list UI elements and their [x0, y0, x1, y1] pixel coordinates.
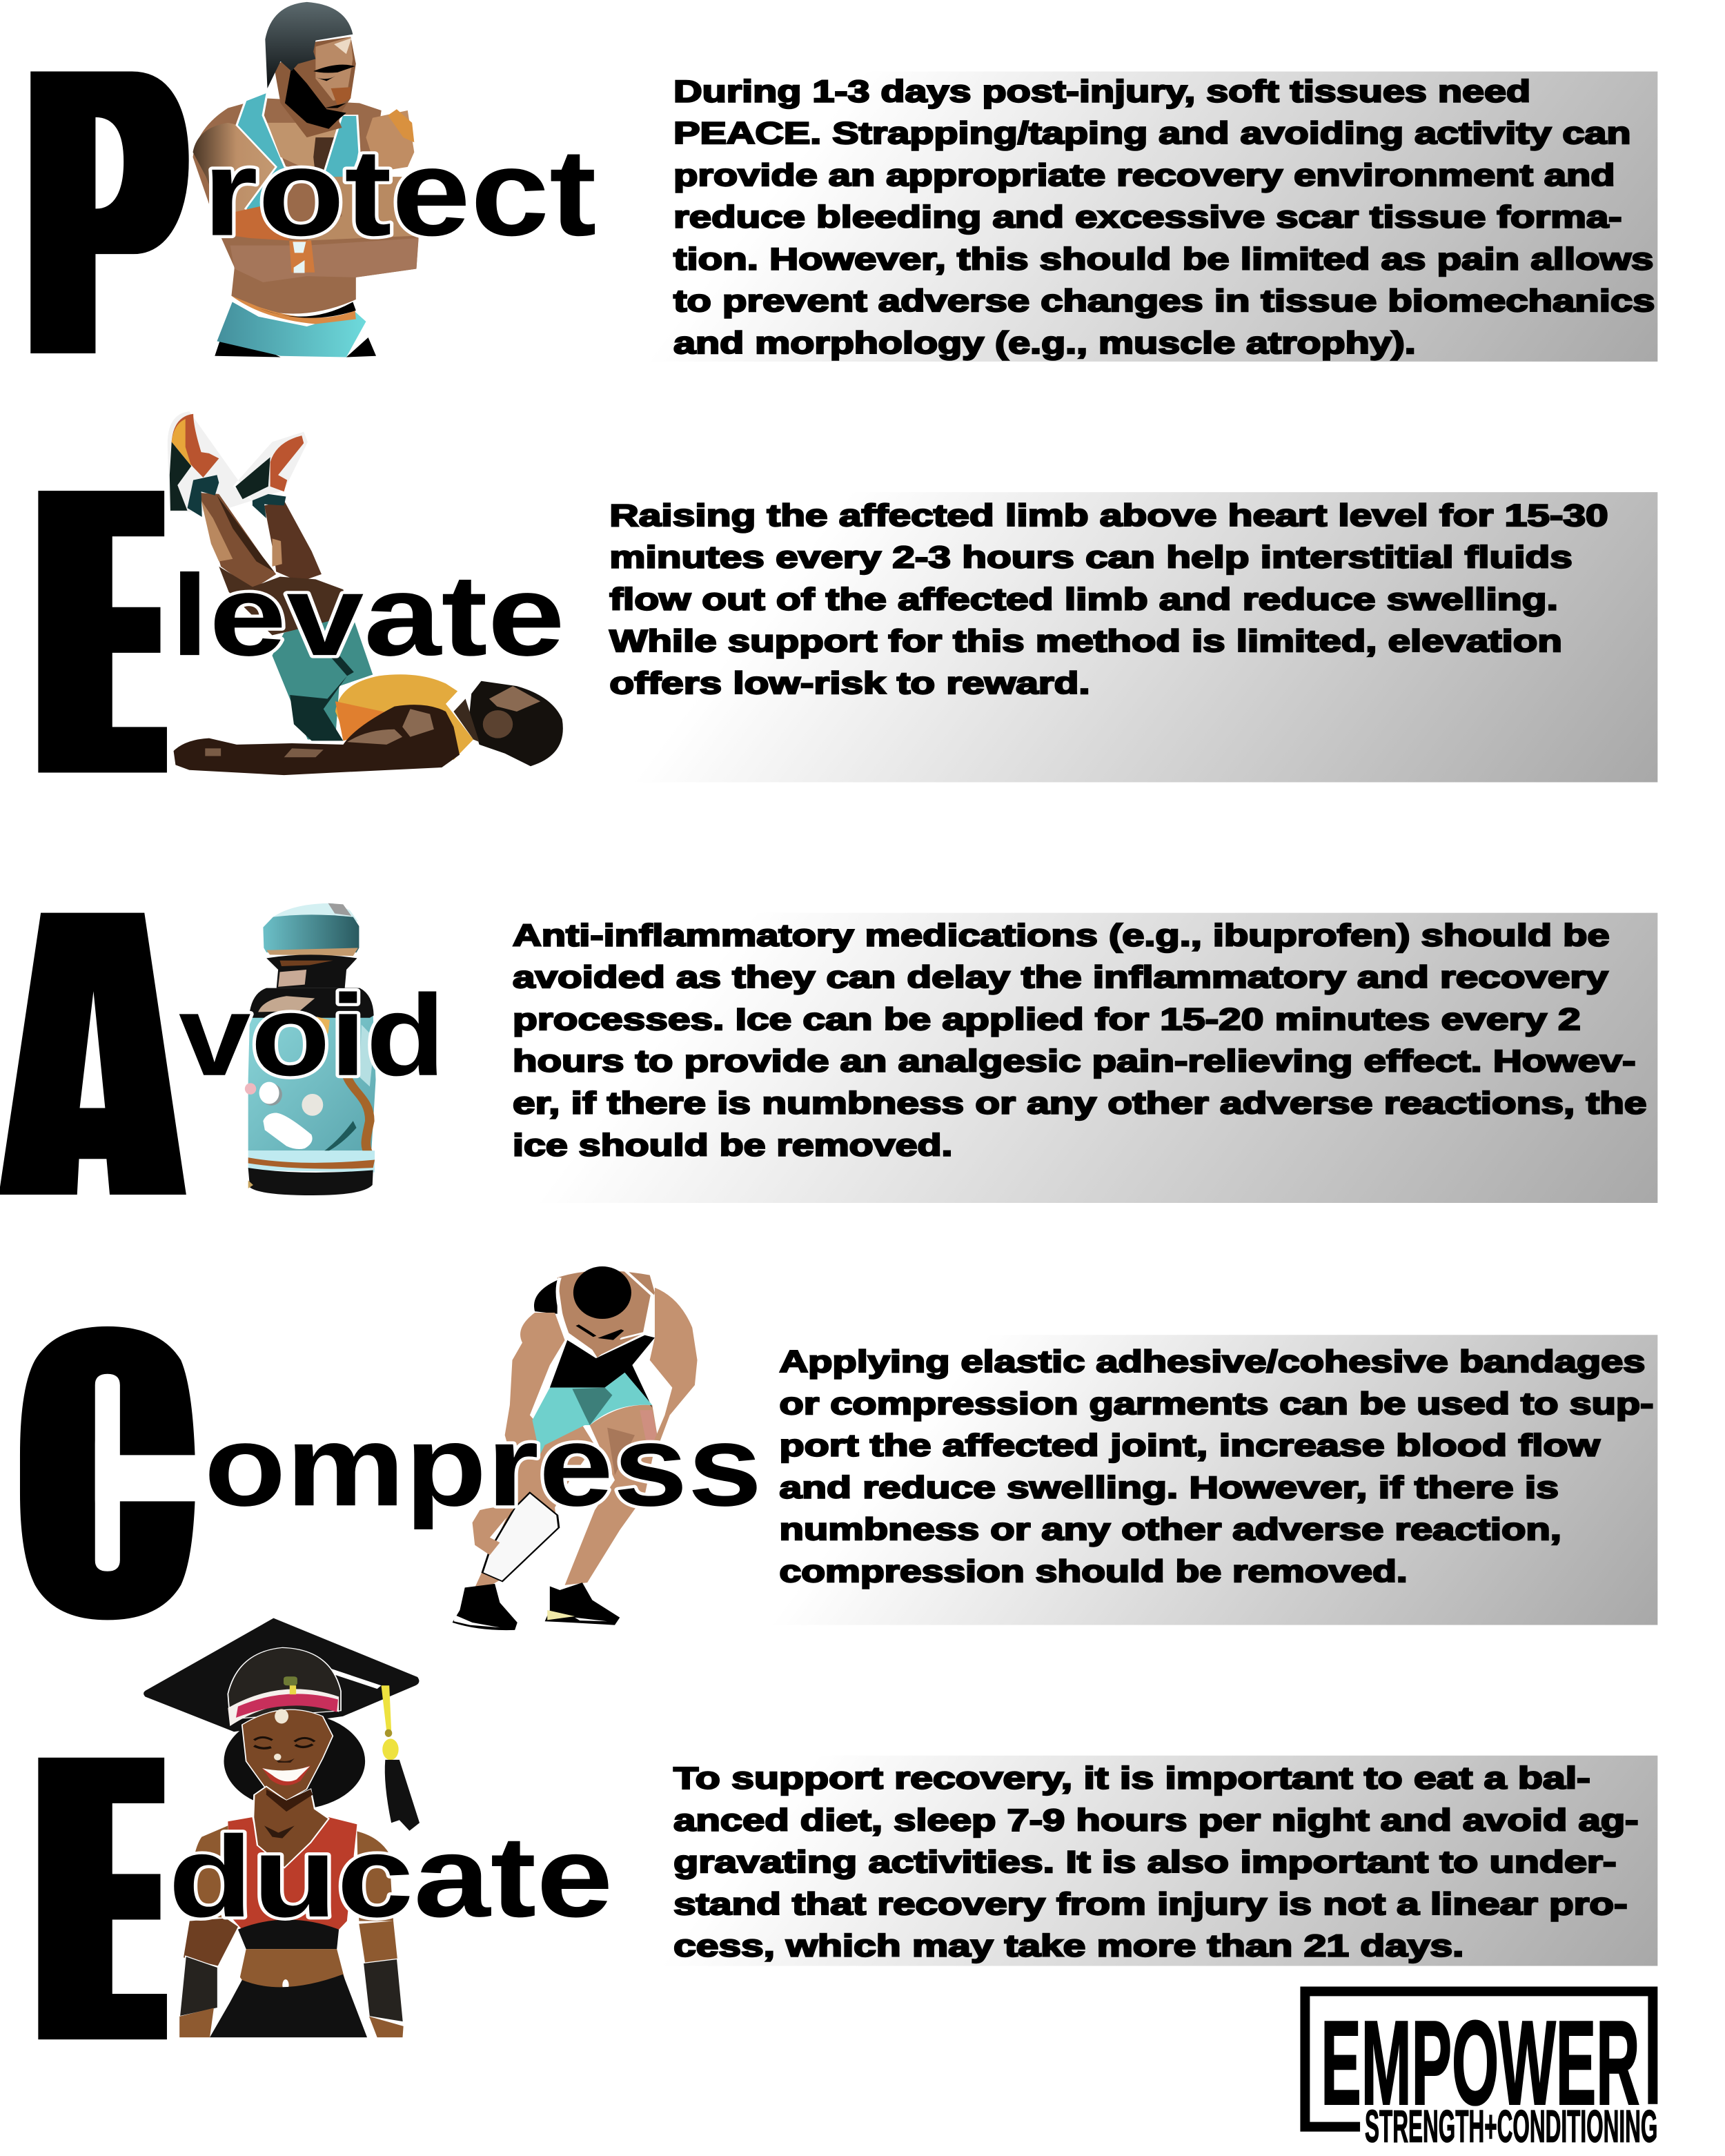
body text — [779, 1345, 1653, 1589]
body text — [673, 1762, 1638, 1963]
body text: anced diet, sleep 7-9 hours per night and avoid ag- — [673, 1803, 1638, 1837]
body text: Anti-inflammatory medications (e.g., ibuprofen) should be — [513, 919, 1610, 952]
panel: Compress description — [770, 1335, 1657, 1625]
body text: reduce bleeding and excessive scar tissue forma- — [673, 201, 1622, 235]
body text — [513, 919, 1646, 1162]
panel: Avoid description — [513, 913, 1657, 1203]
logo frame — [1300, 1986, 1657, 2132]
body text: PEACE. Strapping/taping and avoiding activity can — [673, 117, 1631, 150]
body text: er, if there is numbness or any other adverse reactions, the — [513, 1087, 1646, 1121]
body text: and morphology (e.g., muscle atrophy). — [673, 326, 1416, 360]
body text: offers low-risk to reward. — [609, 667, 1090, 700]
word: rotect: rotect — [203, 124, 597, 262]
illustration: athlete holding compressed leg — [453, 1266, 698, 1630]
section: Elevate — [57, 402, 1657, 860]
word: ompress: ompress — [204, 1402, 762, 1530]
body text: Applying elastic adhesive/cohesive bandages — [779, 1345, 1645, 1379]
section: Avoid — [32, 825, 1657, 1282]
body text: tion. However, this should be limited as pain allows — [673, 242, 1653, 276]
body text: port the affected joint, increase blood flow — [779, 1429, 1600, 1463]
body text: cess, which may take more than 21 days. — [673, 1930, 1463, 1963]
illustration: graduate athlete — [144, 1618, 420, 2037]
body text: To support recovery, it is important to eat a bal- — [673, 1762, 1590, 1796]
body text: minutes every 2-3 hours can help interstitial fluids — [609, 541, 1573, 575]
body text: or compression garments can be used to sup- — [779, 1387, 1653, 1421]
body text: Raising the affected limb above heart level for 15-30 — [609, 499, 1608, 533]
gradient background — [770, 1335, 1657, 1625]
body text: hours to provide an analgesic pain-relieving effect. Howev- — [513, 1045, 1635, 1079]
illustration: athlete with crossed arms — [193, 2, 419, 357]
body text: While support for this method is limited, elevation — [609, 625, 1562, 658]
body text — [609, 499, 1608, 700]
word: void: void — [179, 972, 445, 1100]
panel: Protect description — [646, 72, 1657, 362]
gradient background — [660, 1756, 1657, 1966]
gradient background — [536, 913, 1657, 1203]
logo: Empower Strength + Conditioning — [1300, 1986, 1657, 2152]
panel: Elevate description — [609, 492, 1657, 782]
body text — [673, 75, 1655, 360]
body text: and reduce swelling. However, if there is — [779, 1471, 1559, 1505]
body text: to prevent adverse changes in tissue biomechanics — [673, 284, 1655, 318]
illustration: medicine bottle with pills — [245, 903, 376, 1195]
body text: provide an appropriate recovery environment and — [673, 159, 1615, 193]
big letter E: E — [57, 1669, 144, 2127]
body text: gravating activities. It is also important to under- — [673, 1845, 1617, 1879]
panel: Educate description — [660, 1756, 1657, 1966]
big letter E: E — [57, 402, 144, 860]
big letter A: A — [32, 825, 153, 1282]
section: Educate — [57, 1618, 1657, 2127]
word: ducate: ducate — [168, 1813, 613, 1941]
word: levate: levate — [170, 551, 565, 680]
big letter C: C — [34, 1244, 182, 1701]
gradient background — [632, 492, 1657, 782]
body text: flow out of the affected limb and reduce swelling. — [609, 582, 1558, 616]
gradient background — [646, 72, 1657, 362]
body text: During 1-3 days post-injury, soft tissues need — [673, 75, 1530, 108]
section: Compress — [20, 1244, 1657, 1701]
body text: ice should be removed. — [513, 1128, 952, 1162]
body text: avoided as they can delay the inflammatory and recovery — [513, 961, 1608, 994]
section: Protect — [32, 0, 1657, 441]
body text: processes. Ice can be applied for 15-20 minutes every 2 — [513, 1003, 1581, 1037]
illustration: athlete lying with legs elevated — [168, 411, 563, 775]
body text: numbness or any other adverse reaction, — [779, 1513, 1561, 1547]
body text: compression should be removed. — [779, 1555, 1408, 1589]
body text: stand that recovery from injury is not a linear pro- — [673, 1888, 1628, 1921]
